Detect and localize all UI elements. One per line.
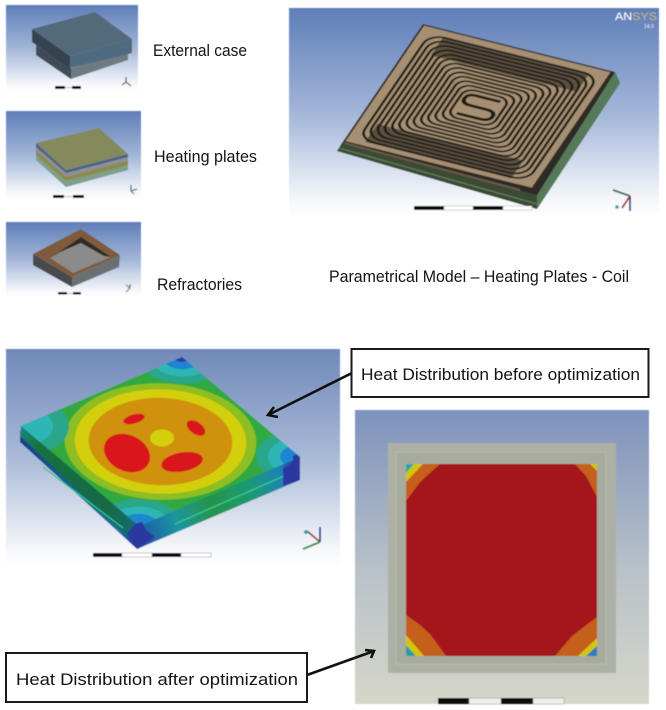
label: Parametrical Model - Heating Plates - Coil: Parametrical Model – Heating Plates - Coil	[329, 268, 629, 286]
callout: before optimization	[352, 349, 648, 397]
heat contours on top surface	[21, 356, 300, 524]
label: External case: External case	[153, 42, 247, 60]
scale bar	[438, 698, 564, 704]
red plate with corner contours	[406, 464, 597, 656]
scale bar	[93, 553, 211, 557]
label: Heating plates: Heating plates	[154, 148, 257, 166]
panel: external case model	[6, 5, 138, 92]
panel: refractories model	[6, 222, 141, 297]
scale bar	[58, 292, 81, 294]
icon: heating plates stack	[36, 128, 128, 187]
coil plate with spiral	[346, 26, 610, 188]
lower plate sides	[20, 431, 300, 549]
corner blocks	[127, 455, 300, 549]
icon: refractories tray	[33, 229, 120, 287]
arrow: before optimization	[268, 373, 352, 417]
axis triad	[126, 284, 130, 292]
scale bar	[53, 195, 84, 198]
hot spots	[98, 412, 208, 479]
callout: after optimization	[6, 653, 307, 702]
callout: before optimization: Heat Distribution before optimization	[361, 366, 640, 384]
logo: ANSYS: ANSYS	[615, 11, 657, 23]
icon: external case box	[32, 12, 132, 79]
upper plate sides	[20, 426, 300, 536]
logo: ANSYS	[615, 11, 657, 30]
axis triad	[131, 185, 137, 194]
outer grey frame	[388, 443, 616, 673]
panel: heat distribution after optimization	[355, 410, 649, 704]
axis triad	[122, 77, 131, 86]
label: Refractories: Refractories	[157, 276, 242, 294]
panel: parametrical coil model	[289, 8, 659, 218]
axis triad	[613, 190, 630, 211]
panel: heating plates model	[6, 111, 141, 200]
callout: after optimization: Heat Distribution after optimization	[16, 671, 298, 689]
base plate	[337, 24, 620, 209]
axis triad	[303, 527, 320, 549]
inner frame line	[396, 452, 606, 664]
panel: heat distribution before optimization	[5, 348, 341, 558]
scale bar	[414, 206, 532, 210]
scale bar	[55, 86, 81, 89]
logo: ANSYS: 14.0	[644, 24, 654, 30]
arrow: after optimization	[307, 650, 374, 675]
